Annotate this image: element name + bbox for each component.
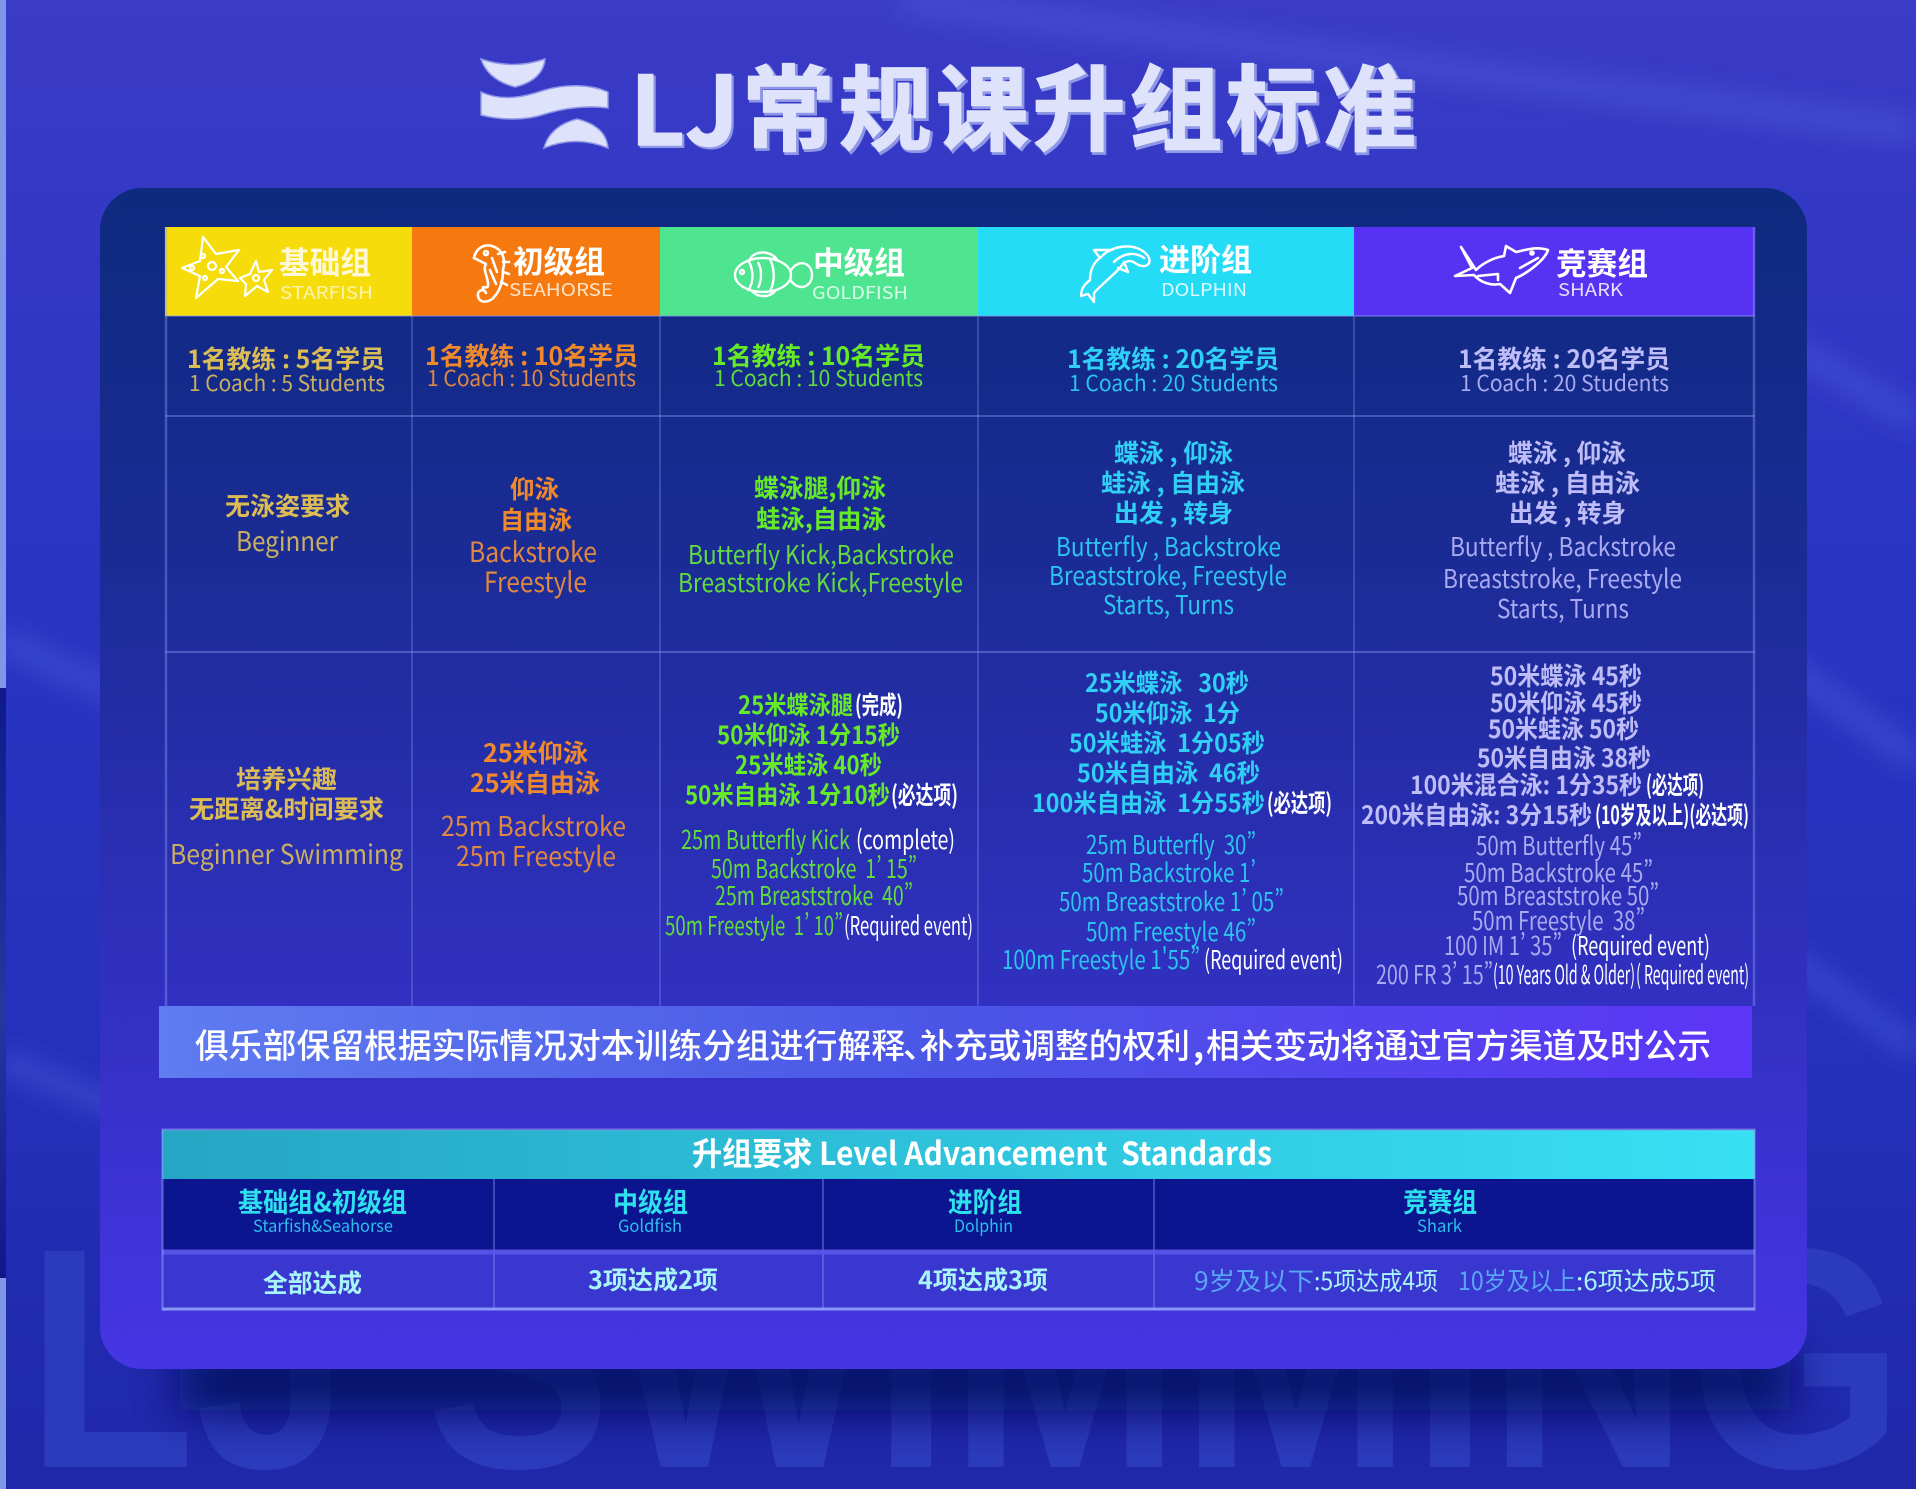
times: shark: 200米自由泳: 3分15秒 (1361, 796, 1592, 832)
strokes: seahorse: 仰泳 (510, 470, 559, 506)
ratio: dolphin: 1名教练 : 20名学员 (1067, 340, 1279, 376)
advancement column headers: 进阶组 (948, 1181, 1022, 1220)
advancement values: :5项达成4项 (1314, 1262, 1438, 1298)
title text: LJ (632, 38, 741, 175)
header cell: shark (1354, 227, 1755, 316)
header cell: starfish: 基础组 (279, 238, 371, 283)
ratio: dolphin: 1 Coach : 20 Students (1069, 366, 1278, 398)
times: shark: 50m Freestyle 38” (1472, 901, 1645, 938)
times: shark: (必达项) (1646, 766, 1704, 802)
times: starfish: 培养兴趣 (236, 760, 337, 796)
table: level advancement standards (162, 1129, 1755, 1310)
strokes: goldfish: 蛙泳,自由泳 (756, 500, 886, 536)
strokes: dolphin: Breaststroke, Freestyle (1049, 556, 1287, 593)
advancement values (162, 1251, 1755, 1310)
times: shark: 50米自由泳 38秒 (1477, 739, 1651, 775)
times: dolphin: (Required event) (1204, 940, 1343, 977)
header cell: dolphin: DOLPHIN (1161, 276, 1247, 302)
advancement heading: 升组要求 Level Advancement Standards (692, 1129, 1272, 1175)
ratio: starfish (187, 340, 385, 398)
times: shark: 50m Breaststroke 50” (1457, 876, 1659, 913)
ratio: goldfish: 1 Coach : 10 Students (714, 361, 923, 393)
strokes: goldfish: 蝶泳腿,仰泳 (754, 469, 886, 505)
times: goldfish: (Required event) (844, 906, 973, 943)
header cell: shark: SHARK (1558, 276, 1623, 302)
advancement values: 全部达成 (263, 1264, 362, 1300)
times: dolphin: 25m Butterfly 30” (1086, 825, 1256, 862)
strokes: shark: Breaststroke, Freestyle (1443, 559, 1682, 596)
advancement column headers: Starfish&Seahorse (253, 1212, 393, 1237)
header cell: seahorse (412, 227, 660, 316)
times: dolphin: 50米仰泳 1分 (1095, 694, 1240, 730)
times: goldfish: (complete) (856, 820, 955, 857)
times: dolphin: 100m Freestyle 1'55” (1002, 940, 1200, 977)
times: goldfish: (完成) (855, 686, 903, 722)
strokes: shark: Butterfly , Backstroke (1450, 527, 1676, 564)
strokes: starfish: 无泳姿要求 (225, 487, 350, 523)
strokes: dolphin: 蝶泳 , 仰泳 (1114, 434, 1233, 470)
ratio: shark (1458, 340, 1670, 398)
advancement column headers (162, 1179, 1755, 1251)
header cell: starfish (165, 227, 412, 316)
times: goldfish: 25米蝶泳腿 (738, 686, 853, 722)
strokes: dolphin: 出发 , 转身 (1114, 494, 1233, 530)
strokes: goldfish: Breaststroke Kick,Freestyle (678, 563, 963, 600)
times: goldfish: (必达项) (891, 776, 958, 812)
times: shark: 50米蝶泳 45秒 (1490, 657, 1642, 693)
strokes: dolphin: Butterfly , Backstroke (1056, 527, 1281, 564)
strokes: starfish: Beginner (236, 520, 338, 559)
times: shark: 100米混合泳: 1分35秒 (1410, 766, 1642, 802)
title (481, 35, 1418, 175)
notice banner: , (1193, 1019, 1204, 1068)
times: shark: (10 Years Old & Older) (1493, 955, 1635, 992)
times: shark: 200 FR 3’ 15” (1376, 955, 1493, 992)
notice banner: 相关变动将通过官方渠道及时公示 (1206, 1019, 1711, 1068)
strokes: dolphin (1049, 434, 1287, 622)
strokes: seahorse: 自由泳 (500, 501, 572, 537)
ratio: starfish: 1名教练 : 5名学员 (187, 340, 385, 376)
header cell: goldfish (660, 227, 978, 316)
notice banner: 俱乐部保留根据实际情况对本训练分组进行解释 (195, 1019, 905, 1068)
notice banner: 、 (903, 1019, 937, 1068)
advancement column headers: Shark (1417, 1212, 1463, 1237)
strokes: goldfish: Butterfly Kick,Backstroke (688, 535, 954, 572)
title text: 常规课升组标准 (742, 35, 1416, 170)
title text: 常规课升组标准 (744, 37, 1418, 172)
advancement heading (162, 1129, 1755, 1179)
times: dolphin: 50m Freestyle 46” (1086, 912, 1256, 949)
strokes: dolphin: Starts, Turns (1103, 585, 1234, 622)
times: starfish: Beginner Swimming (170, 833, 403, 872)
icon: LJ wave logo (481, 59, 608, 148)
times: goldfish: 25m Butterfly Kick (681, 820, 850, 857)
times: goldfish: 50m Backstroke 1’ 15” (711, 849, 917, 886)
icon: seahorse (474, 246, 509, 302)
advancement values: 10岁及以上 (1458, 1262, 1576, 1298)
header cell: shark: 竞赛组 (1556, 239, 1648, 284)
icon: shark (1455, 246, 1548, 293)
times: shark: 50米仰泳 45秒 (1490, 684, 1642, 720)
times: starfish (170, 760, 403, 872)
advancement values: 9岁及以下 (1194, 1262, 1314, 1298)
panel shadow (180, 1350, 1790, 1410)
times: seahorse: 25m Freestyle (456, 835, 616, 874)
times: shark (1361, 657, 1749, 992)
strokes: shark (1443, 434, 1682, 626)
icon: starfish (182, 237, 272, 298)
header cell: seahorse: SEAHORSE (509, 276, 613, 302)
times: shark: 100 IM 1’ 35” (1444, 926, 1562, 963)
icon: goldfish (735, 252, 812, 296)
times: dolphin: 50m Backstroke 1’ (1082, 853, 1256, 890)
strokes: seahorse: Freestyle (484, 561, 587, 601)
header cell: goldfish: 中级组 (813, 238, 905, 283)
times: seahorse: 25米仰泳 (483, 734, 588, 770)
ratio: starfish: 1 Coach : 5 Students (189, 366, 385, 398)
times: goldfish: 50米仰泳 1分15秒 (717, 716, 900, 752)
times: dolphin: (必达项) (1267, 784, 1332, 820)
times: shark: 50m Backstroke 45” (1464, 853, 1653, 890)
strokes: shark: 出发 , 转身 (1509, 494, 1626, 530)
times: shark: (Required event) (1571, 926, 1710, 963)
strokes: seahorse: Backstroke (469, 531, 597, 571)
times: goldfish: 25米蛙泳 40秒 (735, 746, 882, 782)
times: dolphin: 100米自由泳 1分55秒 (1032, 784, 1265, 820)
times: dolphin: 50米自由泳 46秒 (1077, 754, 1260, 790)
advancement values: 4项达成3项 (918, 1261, 1048, 1297)
main panel (100, 188, 1807, 1369)
times: shark: 50米蛙泳 50秒 (1488, 710, 1639, 746)
times: goldfish: 25m Breaststroke 40” (715, 876, 913, 913)
header cell: goldfish: GOLDFISH (812, 279, 908, 305)
times: dolphin: 50米蛙泳 1分05秒 (1069, 724, 1265, 760)
title text: LJ (630, 36, 739, 173)
time standards row (170, 657, 1749, 992)
ratio: seahorse: 1名教练 : 10名学员 (425, 337, 638, 373)
strokes: seahorse (469, 470, 597, 601)
header cell: dolphin: 进阶组 (1159, 235, 1252, 280)
notice banner (159, 1006, 1752, 1078)
stroke requirements row (225, 434, 1682, 626)
advancement column headers: Goldfish (618, 1212, 682, 1237)
strokes: shark: Starts, Turns (1497, 589, 1629, 626)
times: goldfish: 50m Freestyle 1’ 10” (665, 906, 843, 943)
times: shark: (10岁及以上)(必达项) (1595, 796, 1749, 832)
times: shark: ( Required event) (1636, 955, 1749, 992)
advancement column headers: 中级组 (613, 1181, 688, 1220)
advancement column headers: 基础组&初级组 (238, 1181, 407, 1220)
ratio: seahorse (425, 337, 638, 393)
ratio row (187, 337, 1670, 398)
strokes: shark: 蝶泳 , 仰泳 (1508, 434, 1626, 470)
ratio: dolphin (1067, 340, 1279, 398)
strokes: dolphin: 蛙泳 , 自由泳 (1101, 464, 1245, 500)
icon: dolphin (1081, 246, 1150, 302)
ratio: seahorse: 1 Coach : 10 Students (427, 361, 636, 393)
ratio: goldfish: 1名教练 : 10名学员 (712, 337, 925, 373)
advancement values: :6项达成5项 (1576, 1262, 1716, 1298)
times: dolphin (1002, 664, 1343, 977)
ratio: shark: 1 Coach : 20 Students (1460, 366, 1669, 398)
header cell: seahorse: 初级组 (513, 237, 605, 282)
times: dolphin: 50m Breaststroke 1’ 05” (1059, 882, 1284, 919)
advancement values: 3项达成2项 (588, 1261, 718, 1297)
advancement column headers: 竞赛组 (1403, 1181, 1477, 1220)
table: level standards (165, 227, 1755, 1006)
times: shark: 50m Butterfly 45” (1476, 826, 1642, 863)
strokes: goldfish (678, 469, 963, 600)
times: goldfish (665, 686, 973, 943)
times: seahorse: 25m Backstroke (441, 805, 626, 844)
header cell: starfish: STARFISH (280, 279, 373, 305)
header cell: dolphin (978, 227, 1354, 316)
notice banner: 补充或调整的权利 (920, 1019, 1190, 1068)
strokes: starfish (225, 487, 350, 559)
times: seahorse (441, 734, 626, 874)
times: dolphin: 25米蝶泳 30秒 (1085, 664, 1249, 700)
advancement column headers: Dolphin (954, 1212, 1013, 1237)
ratio: shark: 1名教练 : 20名学员 (1458, 340, 1670, 376)
times: goldfish: 50米自由泳 1分10秒 (685, 776, 890, 812)
times: starfish: 无距离&时间要求 (189, 790, 384, 826)
times: seahorse: 25米自由泳 (470, 764, 600, 800)
strokes: shark: 蛙泳 , 自由泳 (1495, 464, 1640, 500)
ratio: goldfish (712, 337, 925, 393)
table grid lines (165, 227, 1755, 1006)
